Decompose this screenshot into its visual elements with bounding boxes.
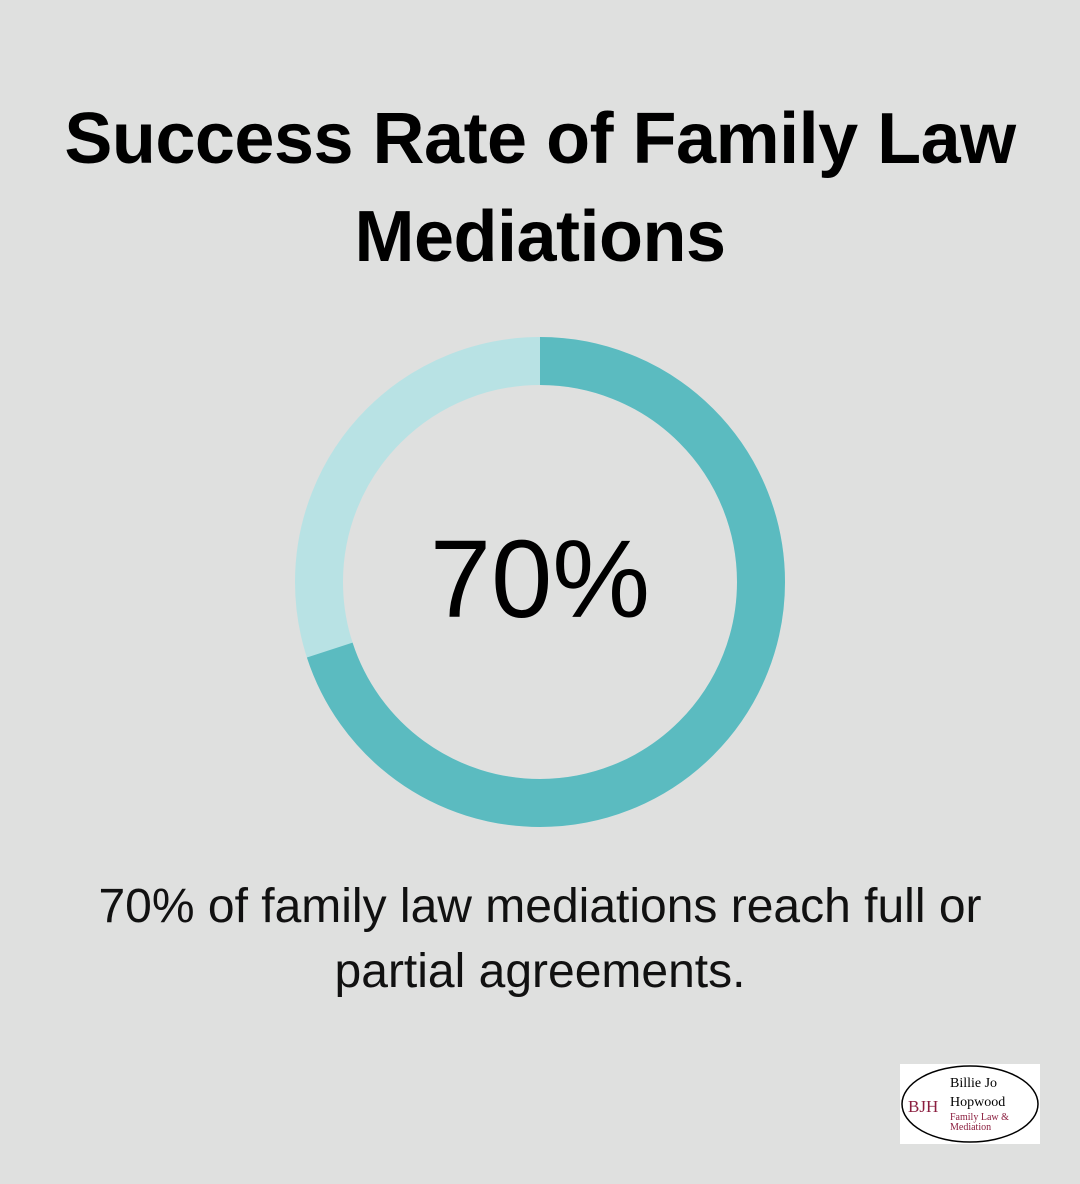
logo	[900, 1064, 1040, 1144]
title: Success Rate of Family Law	[64, 99, 1016, 179]
logo: Billie Jo	[950, 1076, 997, 1091]
title	[64, 99, 1016, 277]
description text: 70% of family law mediations reach full or	[98, 880, 982, 933]
description text: partial agreements.	[335, 945, 745, 998]
ring background	[319, 361, 761, 803]
ring value 70%	[319, 361, 761, 803]
logo: Mediation	[950, 1122, 991, 1133]
title: Mediations	[354, 197, 726, 277]
logo: Family Law &	[950, 1112, 1009, 1123]
center value: 70%	[430, 518, 650, 641]
description text	[98, 880, 982, 998]
logo: BJH	[908, 1097, 938, 1116]
logo: Hopwood	[950, 1095, 1005, 1110]
